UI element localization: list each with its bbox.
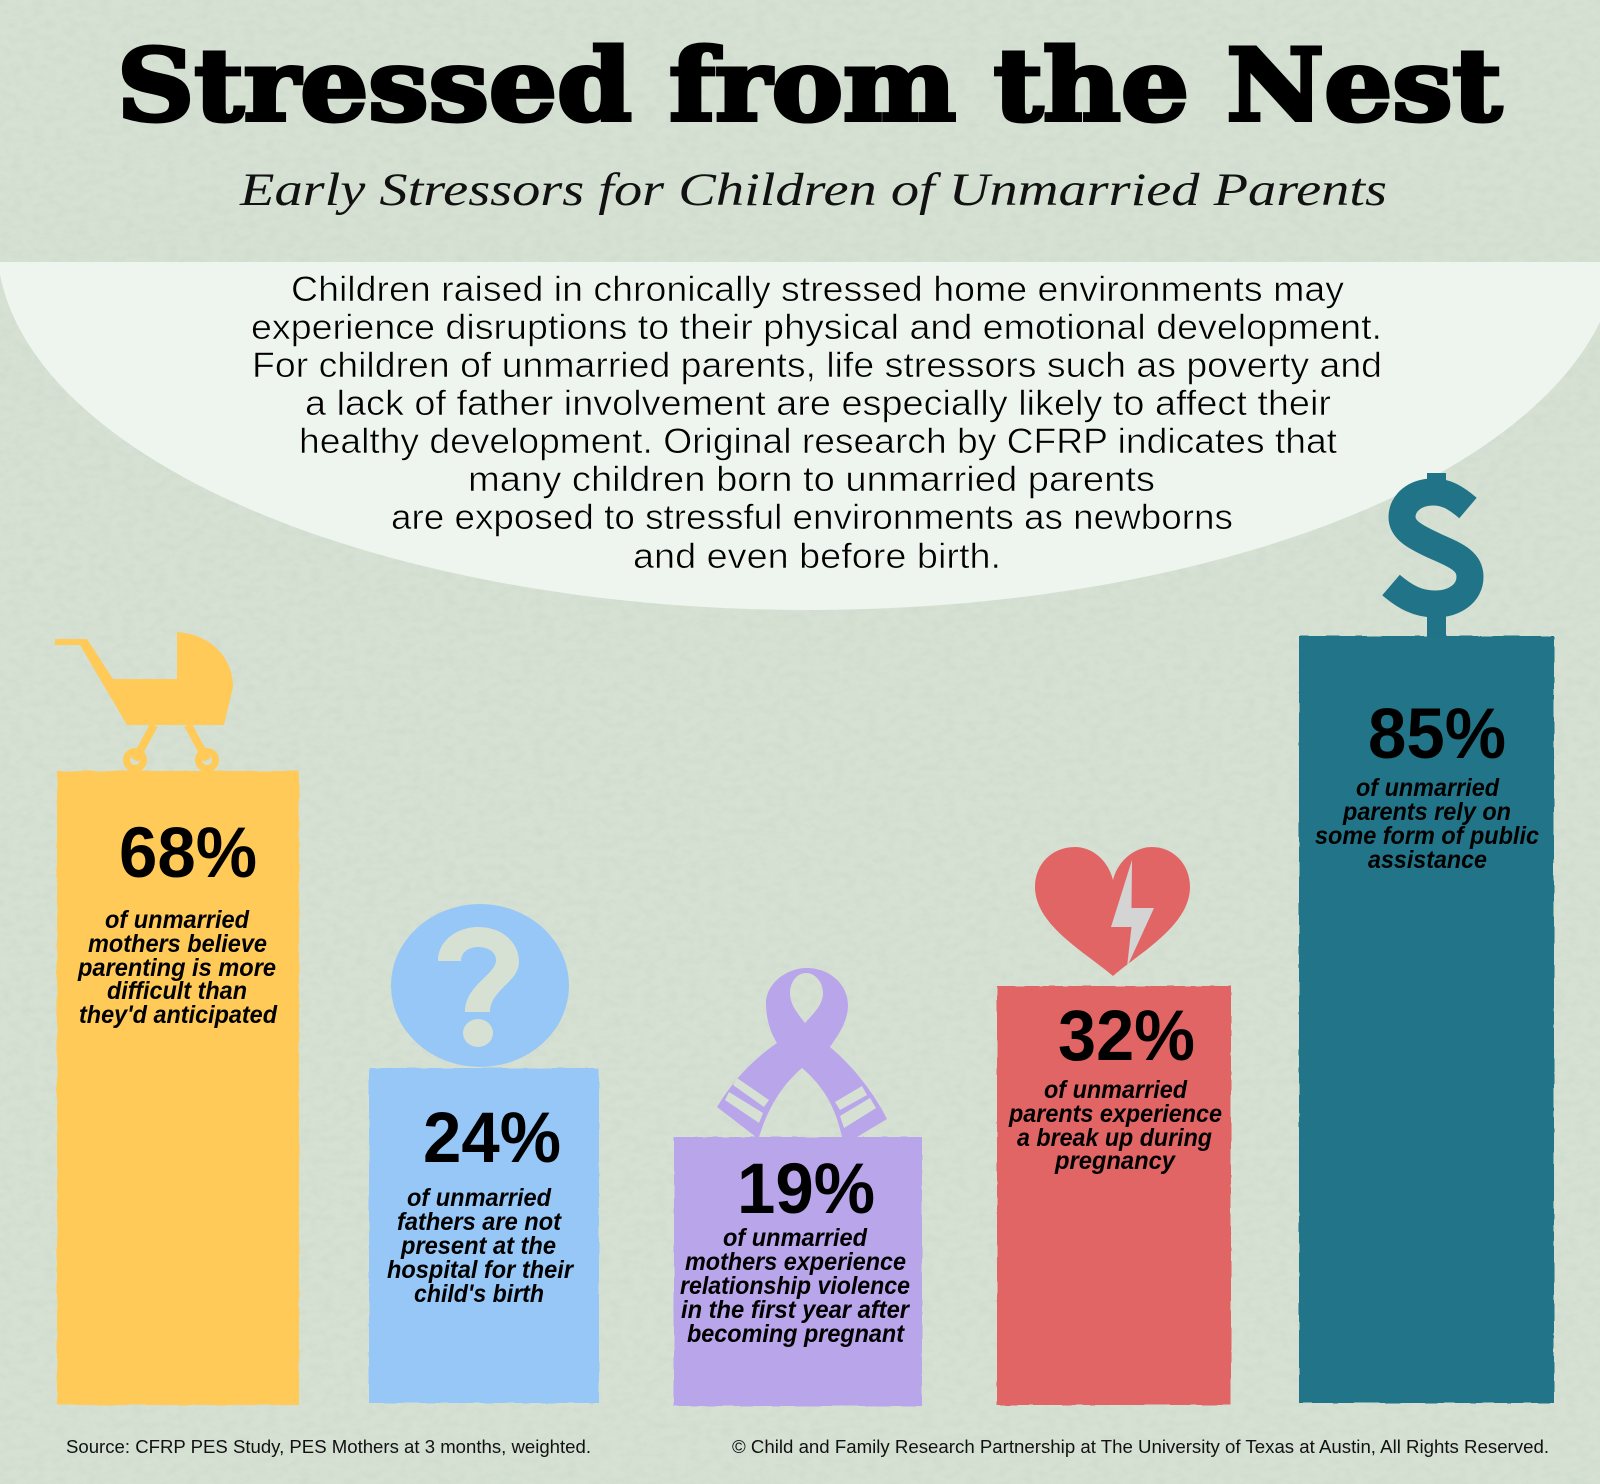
panel: 85% teal bar — [1299, 473, 1554, 1403]
description: relationship violence — [680, 1272, 910, 1300]
description — [680, 1224, 910, 1348]
description: of unmarried — [1356, 774, 1500, 802]
description: mothers experience — [685, 1248, 906, 1276]
description: of unmarried — [1044, 1076, 1188, 1104]
description: assistance — [1368, 846, 1487, 874]
icon: broken heart — [1035, 847, 1190, 976]
description: parents rely on — [1342, 798, 1511, 826]
description: fathers are not — [397, 1208, 563, 1236]
panel: intro ellipse — [0, 262, 1600, 610]
stat: 32%: 32% — [1058, 997, 1195, 1076]
intro text block: healthy development. Original research by CFRP indicates that — [299, 422, 1337, 461]
description: child's birth — [414, 1280, 544, 1308]
source note: Source: CFRP PES Study, PES Mothers at 3 months, weighted. — [66, 1437, 591, 1457]
description: parents experience — [1008, 1100, 1222, 1128]
intro text block: many children born to unmarried parents — [468, 460, 1155, 499]
panel: 19% purple bar — [674, 968, 922, 1406]
description: they'd anticipated — [79, 1001, 278, 1029]
icon: question mark — [391, 904, 569, 1067]
bar — [674, 1137, 922, 1406]
stat: 85%: 85% — [1368, 695, 1506, 774]
title: Stressed from the Nest — [117, 28, 1502, 144]
panel: 68% yellow bar — [55, 632, 299, 1405]
icon: baby stroller — [55, 632, 233, 768]
panel: 24% blue bar — [369, 904, 599, 1403]
bar — [997, 986, 1231, 1405]
bar — [57, 771, 299, 1405]
panel: 32% red bar — [997, 847, 1231, 1405]
description: some form of public — [1315, 822, 1539, 850]
bar — [1299, 636, 1554, 1403]
description: present at the — [400, 1232, 556, 1260]
intro text block: are exposed to stressful environments as newborns — [391, 498, 1233, 537]
description: of unmarried — [407, 1184, 552, 1212]
description: mothers believe — [88, 930, 267, 958]
description: difficult than — [107, 977, 247, 1005]
description: of unmarried — [723, 1224, 868, 1252]
copyright note: © Child and Family Research Partnership at The University of Texas at Austin, All Rights Reserved. — [732, 1437, 1549, 1457]
description: a break up during — [1017, 1124, 1212, 1152]
description: of unmarried — [105, 906, 250, 934]
intro text block: experience disruptions to their physical and emotional development. — [251, 308, 1382, 347]
description: pregnancy — [1054, 1147, 1176, 1175]
description: in the first year after — [681, 1296, 910, 1324]
description: becoming pregnant — [687, 1320, 906, 1348]
stat: 68%: 68% — [119, 814, 257, 893]
icon: awareness ribbon — [717, 968, 887, 1137]
intro text block: Children raised in chronically stressed home environments may — [291, 270, 1345, 309]
intro text block: For children of unmarried parents, life stressors such as poverty and — [252, 346, 1382, 385]
bar — [369, 1068, 599, 1403]
description: parenting is more — [77, 954, 276, 982]
intro text block: and even before birth. — [633, 537, 1001, 576]
description — [1008, 1076, 1222, 1175]
icon: dollar sign — [1391, 473, 1470, 638]
stat: 24%: 24% — [423, 1099, 561, 1178]
description: hospital for their — [387, 1256, 574, 1284]
description — [77, 906, 278, 1029]
intro text block — [251, 270, 1382, 576]
intro text block: a lack of father involvement are especially likely to affect their — [305, 384, 1331, 423]
description — [1315, 774, 1539, 874]
description — [387, 1184, 574, 1308]
stat: 19%: 19% — [737, 1150, 875, 1229]
subtitle: Early Stressors for Children of Unmarried Parents — [239, 164, 1387, 216]
